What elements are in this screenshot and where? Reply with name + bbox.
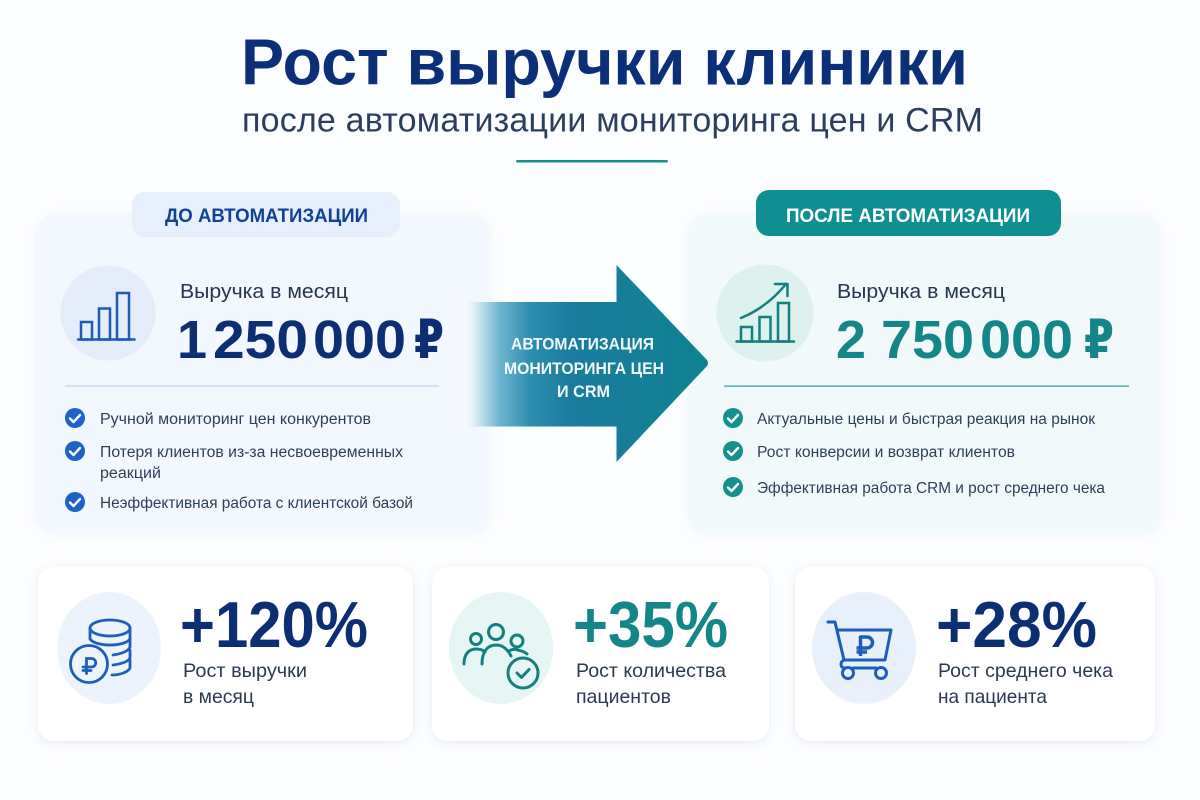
title: Рост выручки клиники [241, 26, 968, 98]
arrow: automation: АВТОМАТИЗАЦИЯ [511, 336, 654, 354]
revenue value: 750 [881, 310, 974, 370]
badge: before automation [132, 192, 400, 237]
icon: coins with ruble [57, 592, 161, 704]
stat card: revenue [38, 567, 413, 741]
badge: after automation: ПОСЛЕ АВТОМАТИЗАЦИИ [786, 206, 1030, 227]
revenue value: 000 [980, 310, 1073, 370]
arrow: automation: МОНИТОРИНГА ЦЕН [504, 360, 664, 378]
check item 1: Актуальные цены и быстрая реакция на рынок [757, 411, 1095, 428]
arrow: automation: И CRM [557, 383, 610, 401]
icon: bar chart [60, 266, 156, 360]
stat description [576, 660, 726, 708]
icon: cart with ruble [812, 592, 916, 704]
badge: after automation [756, 190, 1061, 236]
stat value: +120% [180, 588, 368, 661]
revenue value: ₽ [1084, 310, 1114, 370]
icon: people with check [449, 592, 553, 704]
stat description: на пациента [938, 686, 1047, 708]
stat description [183, 660, 307, 708]
subtitle: после автоматизации мониторинга цен и CRM [242, 102, 983, 140]
panel: before automation [35, 192, 491, 535]
icon: growth chart [716, 264, 814, 362]
list: after items [723, 408, 1105, 497]
check item 3: Неэффективная работа с клиентской базой [100, 495, 413, 512]
stat description: Рост среднего чека [938, 660, 1113, 682]
check item 2: Рост конверсии и возврат клиентов [757, 444, 1015, 461]
stat description: Рост количества [576, 660, 726, 682]
check item 2 [65, 441, 403, 482]
revenue label: Выручка в месяц [180, 280, 348, 303]
revenue value: 000 [313, 310, 406, 370]
check item 3: Эффективная работа CRM и рост среднего чека [757, 480, 1105, 497]
arrow: automation [460, 265, 708, 462]
list: before items [65, 408, 413, 512]
stat value: +28% [936, 588, 1097, 661]
stat description: в месяц [183, 686, 254, 708]
revenue value: 1 [177, 310, 207, 370]
check item 1: Ручной мониторинг цен конкурентов [100, 411, 371, 428]
revenue label: Выручка в месяц [837, 280, 1005, 303]
stat description: пациентов [576, 686, 671, 708]
badge: before automation: ДО АВТОМАТИЗАЦИИ [165, 206, 368, 227]
revenue value: 2 [836, 310, 866, 370]
check item 2: Потеря клиентов из-за несвоевременных [100, 444, 403, 461]
revenue value: 250 [213, 310, 308, 370]
panel: after automation [687, 190, 1162, 535]
stat card: average check [795, 567, 1155, 741]
check item 2: реакций [100, 465, 161, 482]
stat description: Рост выручки [183, 660, 307, 682]
stat card: patients [432, 567, 769, 741]
stat description [938, 660, 1113, 708]
revenue value: ₽ [414, 310, 444, 370]
stat value: +35% [573, 588, 728, 661]
